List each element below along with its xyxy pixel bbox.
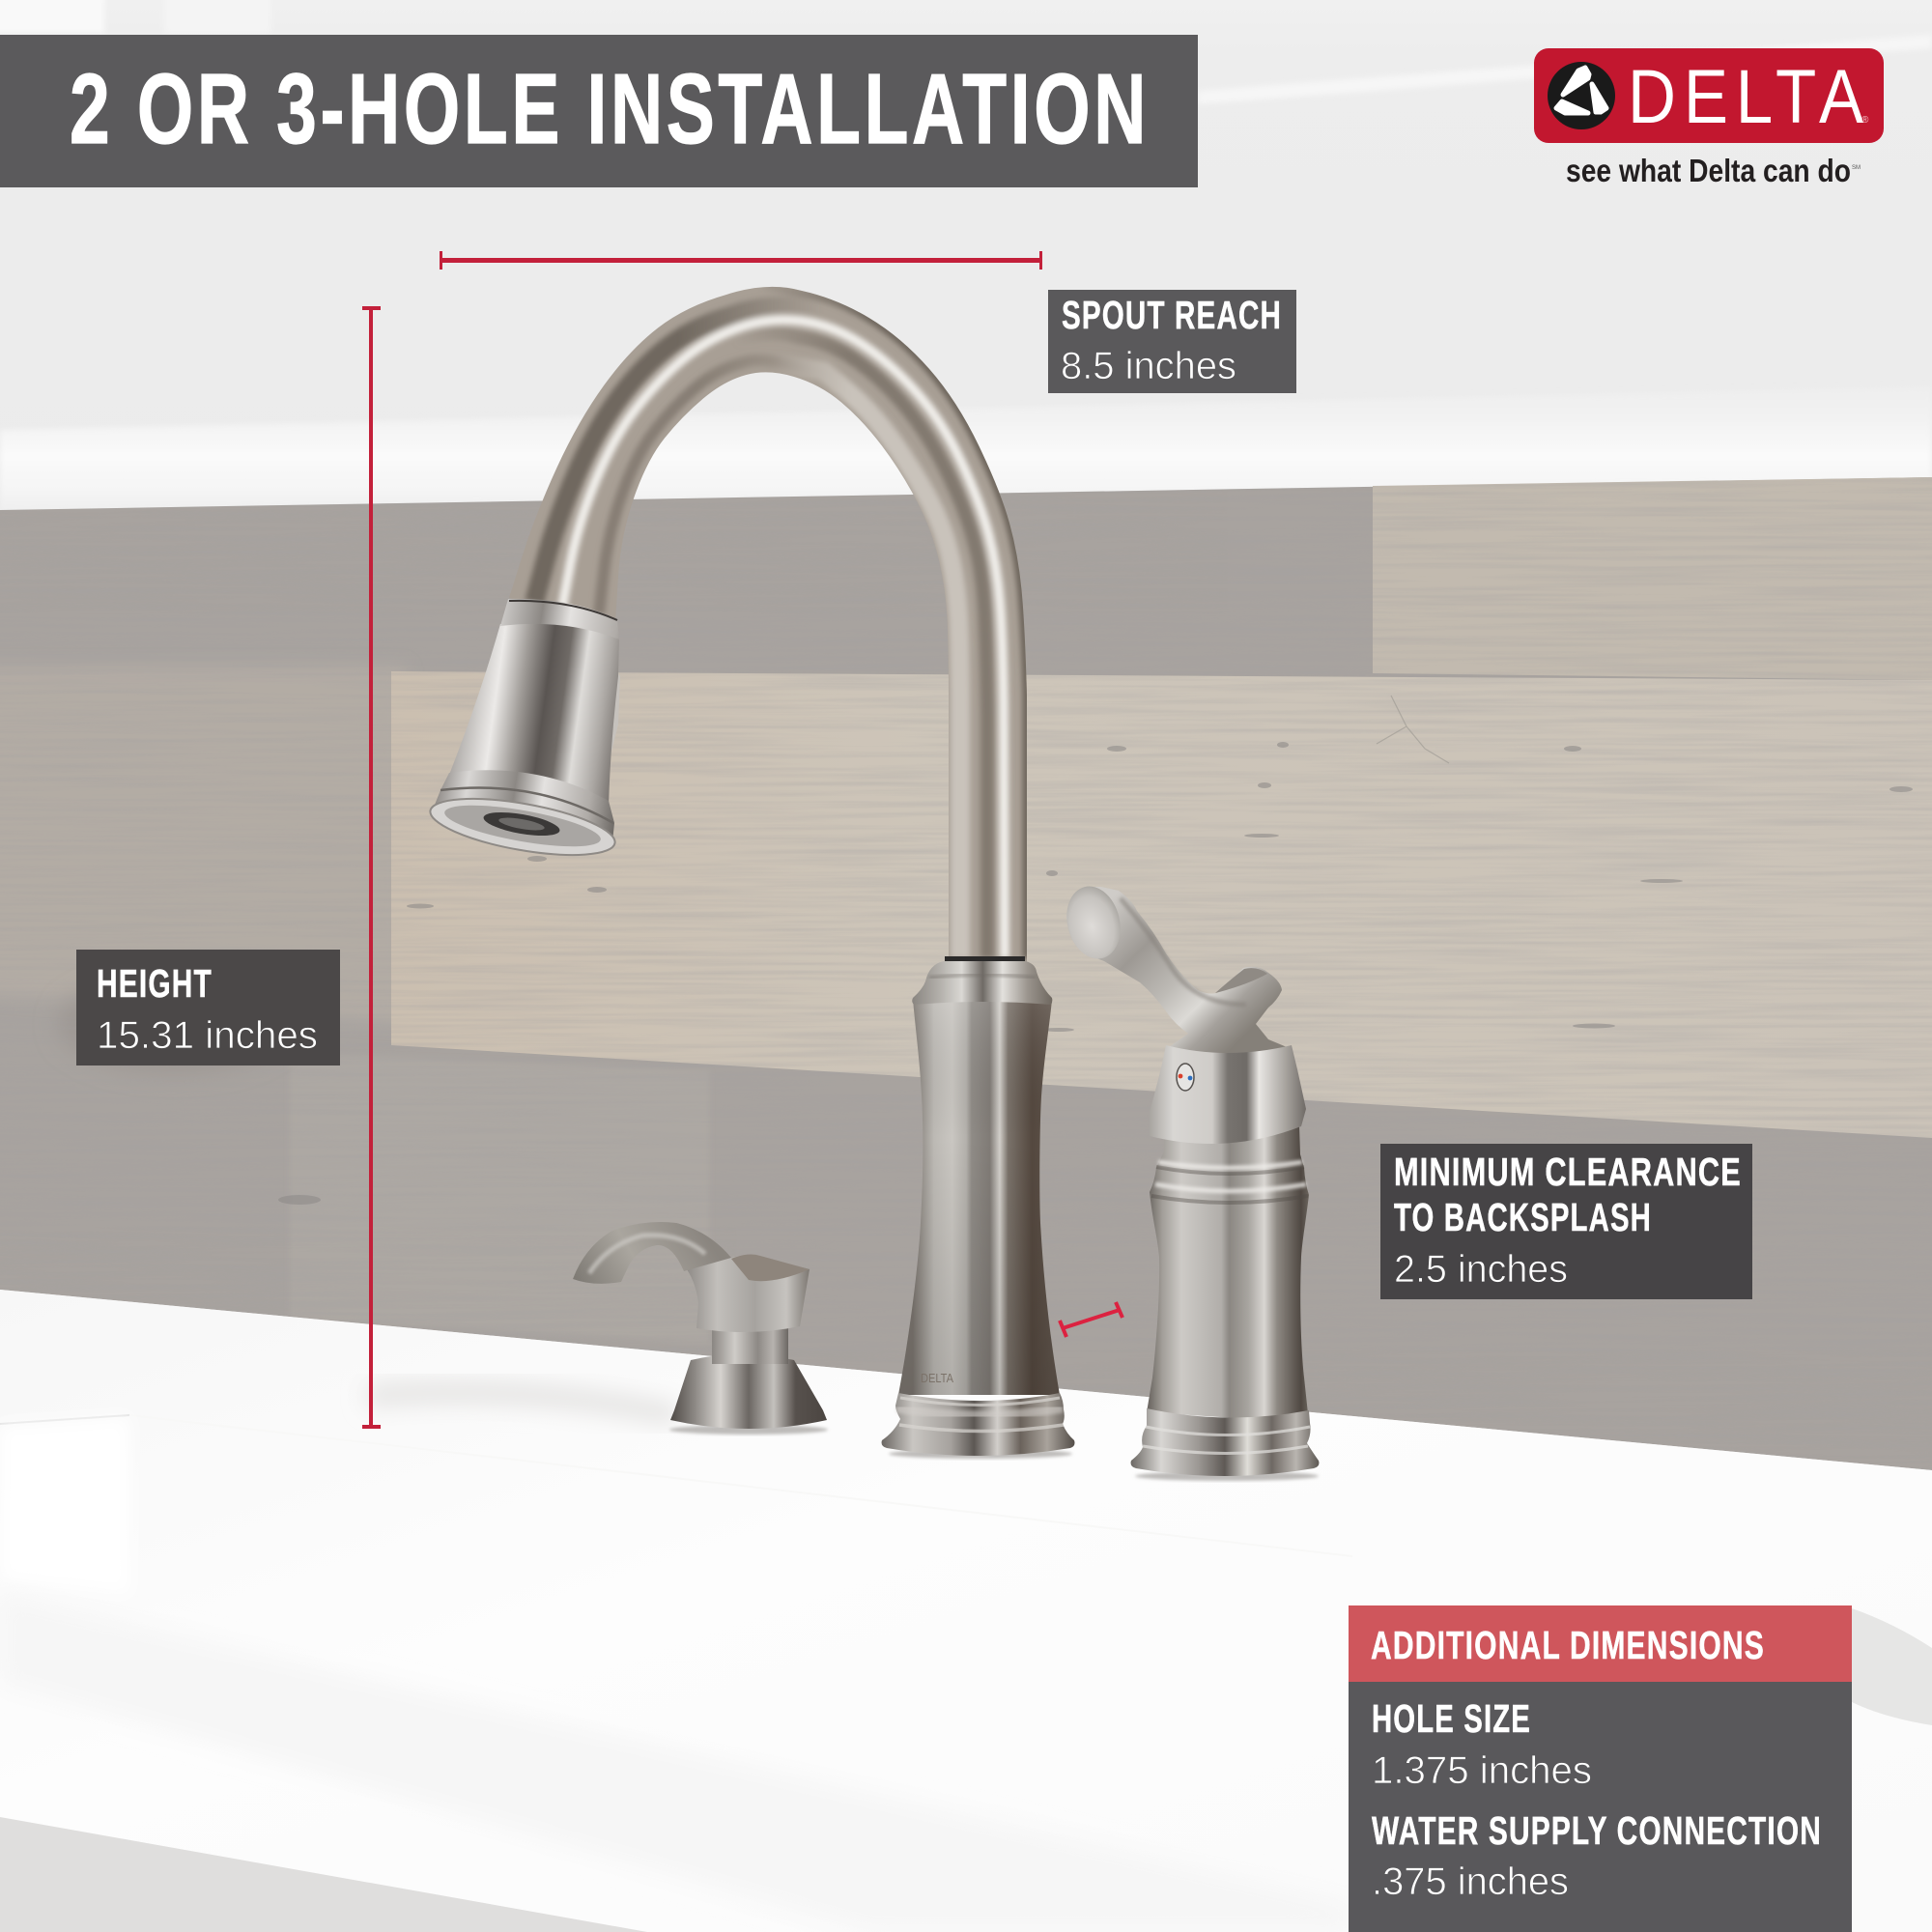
column logo text: DELTA [921, 1371, 953, 1385]
panel header [1349, 1605, 1852, 1682]
sink basin edge [0, 1415, 129, 1424]
callout: minimum clearance: MINIMUM CLEARANCE [1394, 1150, 1742, 1194]
spout [510, 286, 1027, 962]
counter lower edge shadow [0, 1817, 647, 1932]
dispenser head [676, 1223, 810, 1332]
column shading [898, 999, 1060, 1395]
panel: additional dimensions: HOLE SIZE [1372, 1696, 1531, 1741]
dispenser shadow [669, 1425, 828, 1435]
sink basin line [129, 1415, 1352, 1556]
callout: height: HEIGHT [97, 961, 213, 1006]
service mark: SM [1852, 165, 1861, 171]
sprayer ring groove [440, 788, 613, 823]
panel: additional dimensions: ADDITIONAL DIMENSIONS [1371, 1623, 1765, 1667]
title bar [0, 35, 1198, 187]
dispenser neck [712, 1325, 788, 1364]
plank: central light [391, 671, 1932, 1138]
logo wordmark: DELTA [1628, 53, 1871, 139]
callout: minimum clearance: 2.5 inches [1394, 1248, 1568, 1291]
column body [898, 999, 1060, 1395]
title: 2 OR 3-HOLE INSTALLATION [70, 53, 1150, 164]
soap dispenser [573, 1222, 828, 1435]
wood grain [391, 483, 1932, 1128]
sprayer trigger [611, 665, 620, 755]
plank: upper right [1373, 477, 1932, 680]
callout: spout reach: 8.5 inches [1061, 345, 1236, 387]
callout: spout reach [1048, 290, 1296, 393]
sprayer rings [433, 770, 614, 842]
plank: left and lower tones [0, 667, 709, 1343]
wood knots [278, 696, 1913, 1205]
column collar [912, 961, 1052, 1005]
sprayer rim [426, 788, 619, 866]
soft shadow on counter [367, 1392, 676, 1415]
callout: minimum clearance: TO BACKSPLASH [1394, 1195, 1652, 1239]
logo badge [1534, 48, 1884, 143]
handle base [1131, 1408, 1319, 1476]
sprayer nozzle [482, 808, 561, 840]
lever hook hollow [1215, 968, 1267, 993]
panel: additional dimensions [1349, 1605, 1852, 1932]
column base rings [896, 1398, 1064, 1432]
main faucet [426, 270, 1074, 1459]
wood backsplash [0, 473, 1932, 1478]
wall moulding [0, 386, 1932, 512]
handle counter shadow [1135, 1471, 1319, 1481]
callout: height [76, 950, 340, 1065]
dispenser top [731, 1255, 810, 1281]
registered mark: ® [1861, 115, 1869, 126]
panel body [1349, 1682, 1852, 1932]
lever [1066, 887, 1292, 1054]
counter front band [0, 1594, 1352, 1932]
logo mark [1548, 62, 1615, 129]
dispenser spout highlight [589, 1236, 705, 1273]
sprayer neck ring lines [509, 601, 617, 620]
faucet counter shadow [889, 1449, 1072, 1459]
wall [0, 0, 1932, 522]
callout: height: 15.31 inches [97, 1014, 318, 1057]
handle cap [1150, 1045, 1306, 1144]
column base [882, 1393, 1074, 1456]
handle stem ring shadows [1151, 1167, 1308, 1203]
handle base rings [1143, 1427, 1310, 1453]
dimension line: spout reach [440, 251, 1042, 270]
handle stem [1147, 1125, 1309, 1423]
handle stem ring highlights [1155, 1162, 1306, 1191]
dimension line: height [362, 306, 381, 1429]
sprayer face [441, 797, 604, 855]
temperature indicator [1177, 1064, 1194, 1091]
panel: additional dimensions: .375 inches [1372, 1861, 1569, 1903]
dispenser spout [573, 1222, 731, 1284]
spout shading [534, 286, 1027, 958]
sprayer head [426, 599, 620, 866]
dimension line: minimum clearance [1060, 1302, 1122, 1337]
side handle faucet [1060, 881, 1319, 1481]
countertop [0, 1290, 1932, 1932]
spout collar gap [945, 956, 1025, 962]
sink basin glow [0, 1417, 129, 1594]
callout: spout reach: SPOUT REACH [1062, 293, 1282, 337]
sprayer cone [449, 623, 619, 805]
sprayer neck ring [500, 599, 619, 639]
brand logo [1534, 48, 1884, 188]
lever arm streak [1121, 898, 1246, 1005]
column collar ring [929, 975, 1036, 978]
window reflection [0, 0, 1932, 104]
panel: additional dimensions: 1.375 inches [1372, 1749, 1592, 1792]
callout: minimum clearance [1380, 1144, 1752, 1299]
tagline: see what Delta can do [1566, 153, 1851, 188]
towel [1852, 1608, 1932, 1725]
dispenser base [670, 1354, 827, 1429]
lever end [1060, 881, 1127, 964]
